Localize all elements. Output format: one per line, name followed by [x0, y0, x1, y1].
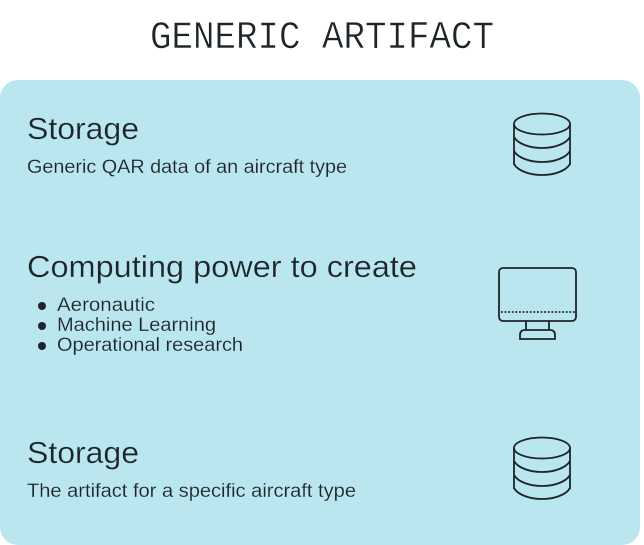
icon: computer monitor	[499, 268, 576, 339]
heading: storage artifact: Storage	[27, 435, 139, 470]
list: disciplines: Operational research	[57, 335, 243, 356]
list: disciplines	[38, 295, 243, 356]
heading: storage: Storage	[27, 111, 139, 146]
list: disciplines: Machine Learning	[57, 315, 216, 336]
text: artifact description: The artifact for a specific aircraft type	[27, 481, 356, 502]
title: GENERIC ARTIFACT	[150, 16, 494, 60]
icon: database top	[514, 114, 570, 175]
icon: database bottom	[514, 438, 570, 499]
list: disciplines: Aeronautic	[57, 295, 155, 316]
heading: computing power: Computing power to create	[27, 249, 417, 284]
text: storage description: Generic QAR data of an aircraft type	[27, 157, 347, 178]
